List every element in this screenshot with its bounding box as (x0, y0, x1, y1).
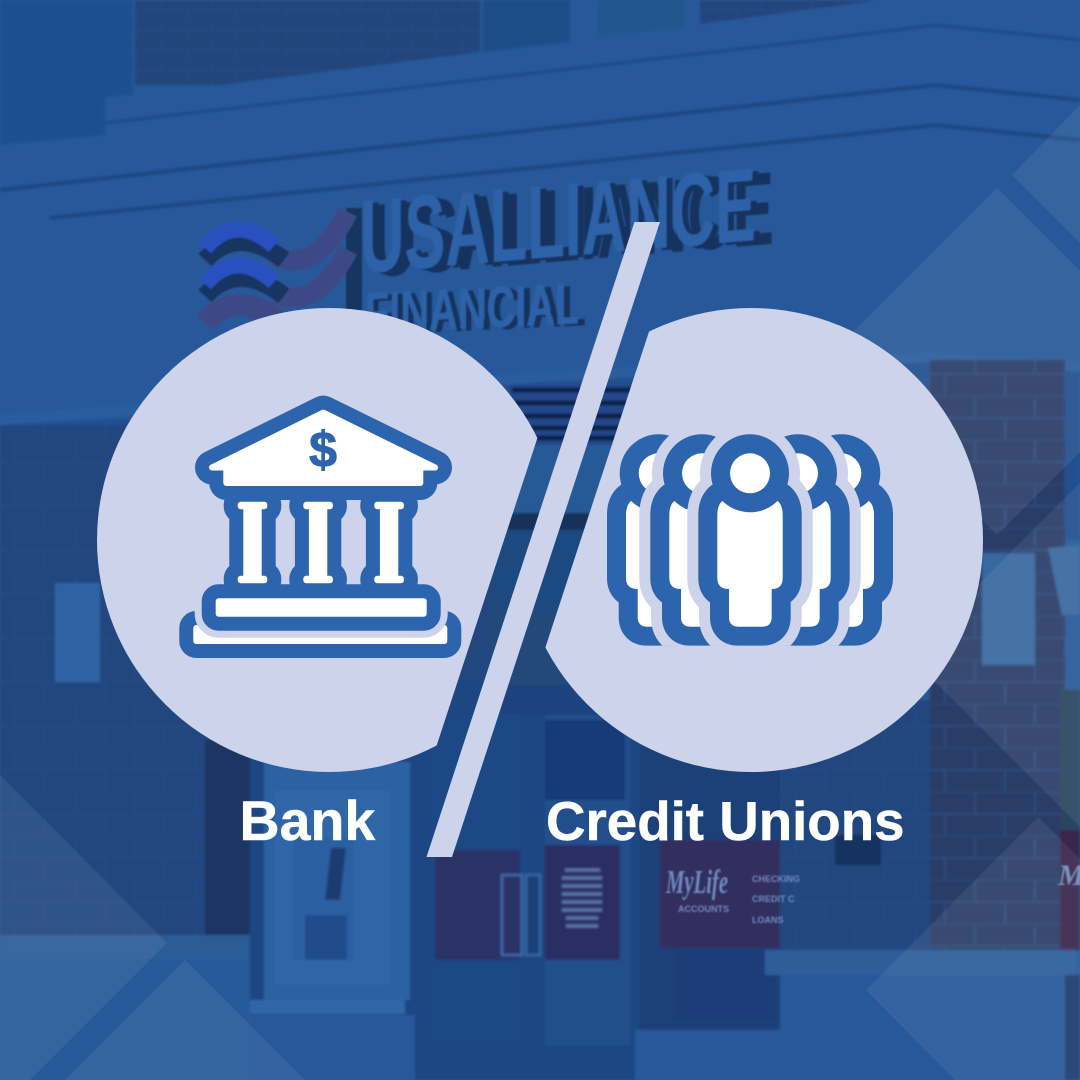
sign: USALLIANCE FINANCIAL lettering: FINANCIAL (370, 273, 586, 348)
sign: USALLIANCE FINANCIAL lettering: USALLIANCE (366, 149, 762, 298)
icon: bank building (193, 413, 447, 644)
window lettering: MyLife accounts poster: CREDIT C (752, 894, 795, 904)
label: Bank: Bank (240, 790, 375, 852)
label: Credit Unions: Credit Unions (546, 790, 905, 852)
dollar sign: $ (309, 422, 337, 478)
sign: wave logo (205, 208, 362, 338)
slash divider (426, 222, 660, 857)
window lettering: MyLife accounts poster (665, 859, 1080, 925)
window lettering: MyLife accounts poster: LOANS (752, 915, 784, 925)
panel: bank circle (97, 308, 561, 772)
window lettering: MyLife accounts poster: MyLife (665, 864, 728, 901)
window lettering: MyLife accounts poster: CHECKING (752, 874, 800, 884)
panel: credit unions circle (519, 308, 983, 772)
sign: USALLIANCE FINANCIAL lettering (360, 147, 774, 348)
window lettering: MyLife accounts poster: ACCOUNTS (678, 904, 729, 914)
icon: group of people (626, 453, 874, 627)
sign: USALLIANCE FINANCIAL lettering: USALLIANCE (360, 147, 756, 296)
sign: USALLIANCE FINANCIAL lettering: FINANCIAL (365, 271, 579, 346)
sign: USALLIANCE FINANCIAL lettering: USALLIANCE (372, 151, 774, 300)
